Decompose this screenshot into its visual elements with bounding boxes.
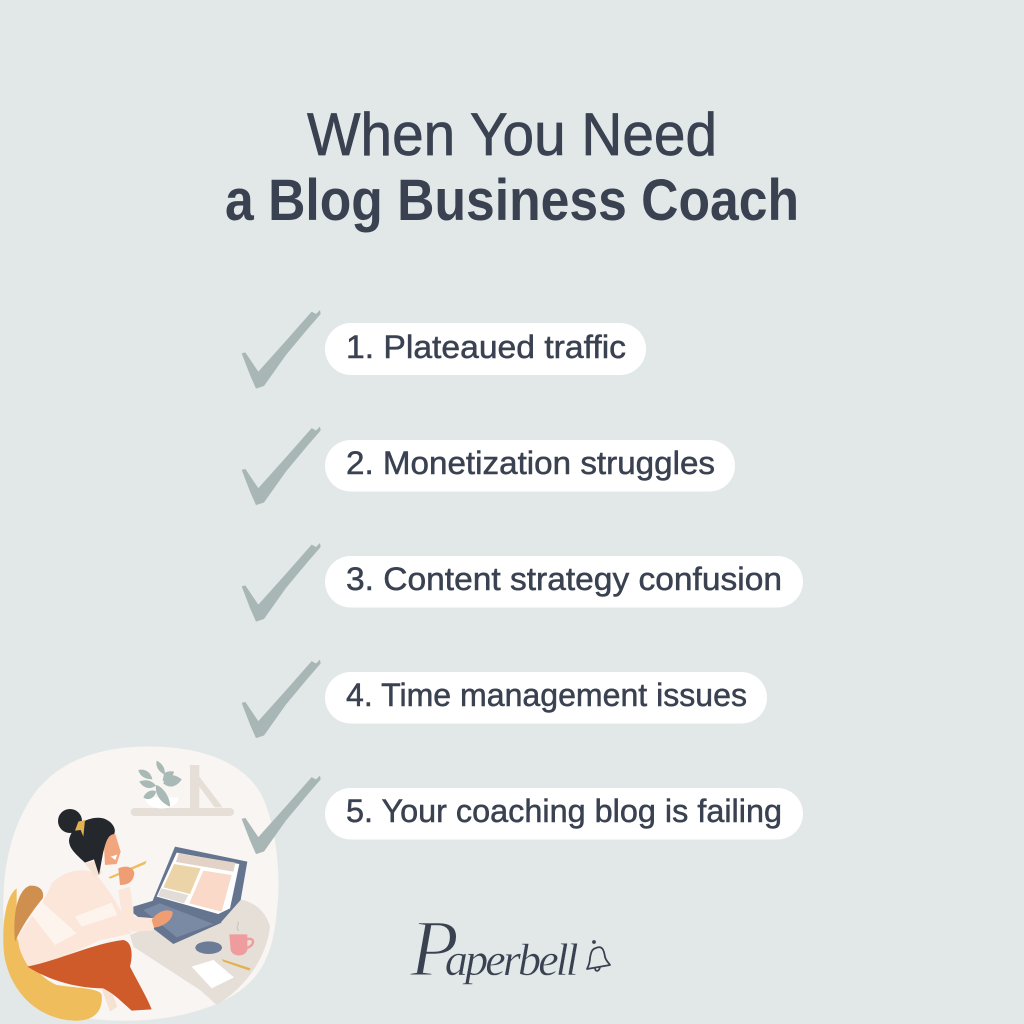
coffee mug	[229, 922, 253, 955]
notepad and pencil	[192, 959, 251, 988]
logo: Paperbell: Paperbell	[409, 905, 578, 993]
body sweater	[18, 870, 157, 967]
wall shelf with plant and books	[131, 761, 234, 816]
title: a Blog Business Coach	[225, 168, 799, 233]
chair	[3, 886, 102, 1021]
item 3: 3. Content strategy confusion	[346, 561, 782, 597]
background blob	[3, 747, 278, 1021]
mouse	[195, 941, 222, 954]
item 4: 4. Time management issues	[346, 677, 747, 713]
laptop	[133, 847, 247, 944]
item 1: 1. Plateaued traffic	[346, 329, 626, 365]
item 5: 5. Your coaching blog is failing	[346, 793, 782, 829]
item 5	[242, 775, 803, 854]
item 2: 2. Monetization struggles	[346, 445, 715, 481]
head and hair	[58, 809, 121, 877]
trousers	[27, 940, 152, 1011]
illustration: woman working at laptop	[3, 747, 278, 1021]
hands and pencil	[108, 861, 173, 928]
checkmark list	[242, 310, 803, 854]
item 1	[242, 310, 646, 389]
item 4	[242, 659, 767, 738]
item 3	[242, 543, 803, 622]
desk	[130, 898, 270, 1005]
title	[225, 101, 799, 233]
title: When You Need	[307, 101, 717, 168]
icon: bell	[587, 941, 610, 971]
back leg and shoe	[102, 987, 117, 1012]
item 2	[242, 426, 735, 505]
